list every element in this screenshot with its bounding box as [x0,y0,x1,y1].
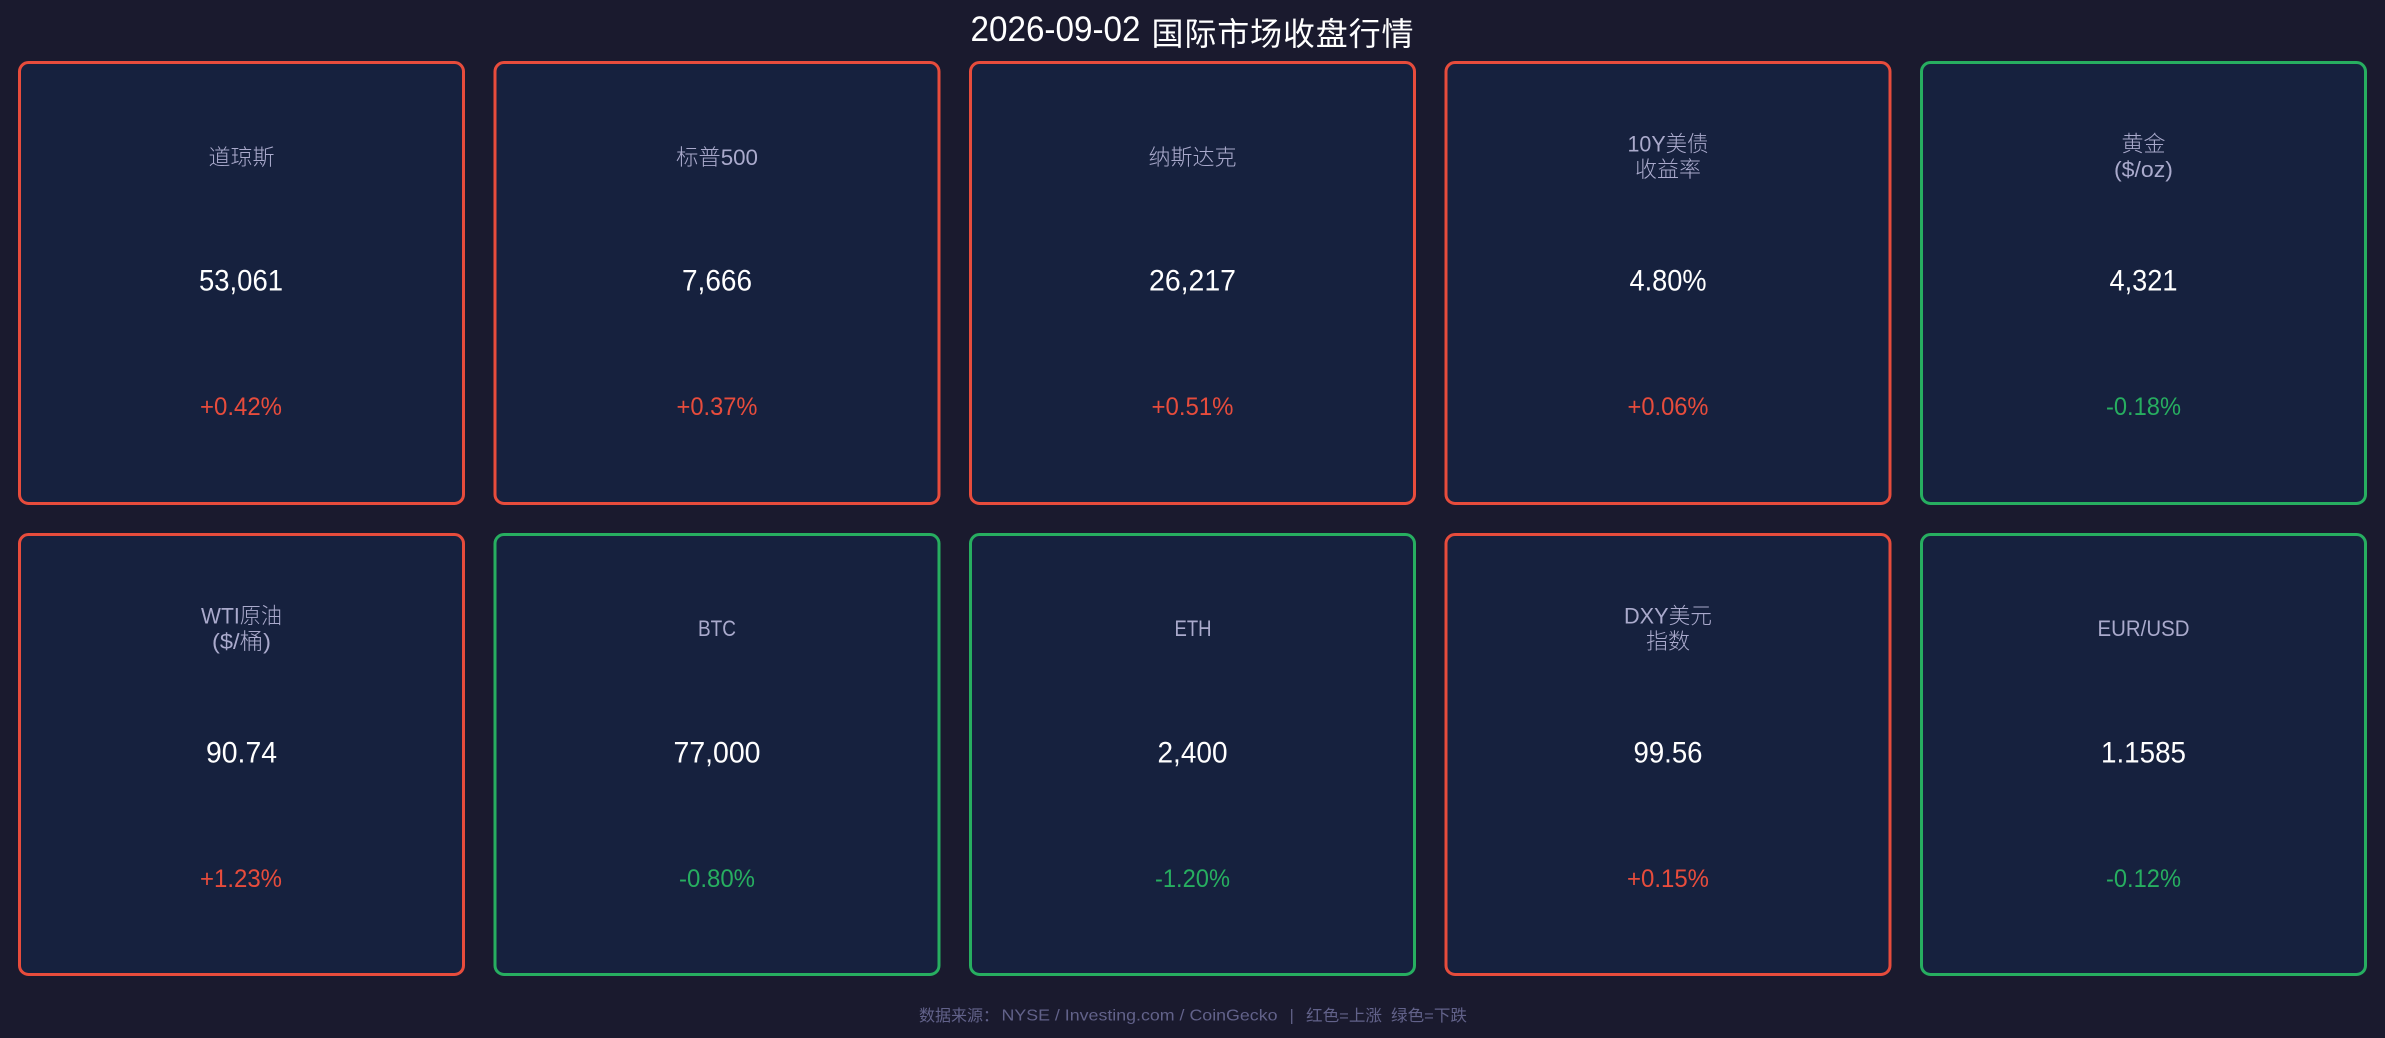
panel: 黄金: -0.18% [2106,393,2181,421]
panel: 10Y美债收益率: 4.80% [1630,264,1706,298]
footer: data source and colour legend [919,1007,1467,1025]
panel: EUR/USD: EUR/USD [2098,616,2190,641]
panel: WTI原油: WTI原油 [201,604,282,628]
panel: 纳斯达克: 26,217 [1149,264,1236,298]
panel: 纳斯达克: +0.51% [1152,393,1234,421]
panel: BTC: BTC [698,616,736,641]
panel: ETH: ETH [1174,616,1212,641]
title: 2026-09-02 [970,10,1140,49]
panel: WTI原油: +1.23% [200,865,282,893]
panel: ETH: 2,400 [1158,736,1228,770]
panel: ETH [970,534,1414,974]
panel: 黄金: 4,321 [2110,264,2178,298]
panel: 标普500: 标普500 [676,145,758,170]
panel: 纳斯达克 [970,62,1414,504]
footer: data source and colour legend: 数据来源： [919,1007,999,1025]
panel: 标普500 [495,62,939,504]
panel: 10Y美债收益率: 10Y美债 [1628,132,1708,156]
panel: 道琼斯: 道琼斯 [208,145,274,170]
panel: 标普500: 7,666 [682,264,752,298]
title: 国际市场收盘行情 [1152,16,1414,52]
panel: 10Y美债收益率 [1446,62,1890,504]
footer: data source and colour legend: | [1290,1008,1294,1024]
panel: 纳斯达克: 纳斯达克 [1148,145,1236,170]
panel: DXY美元指数: +0.15% [1627,865,1709,893]
panel: DXY美元指数: 指数 [1646,629,1690,654]
panel: DXY美元指数: 99.56 [1634,736,1702,770]
panel: 道琼斯: 53,061 [199,264,283,298]
footer: data source and colour legend: 绿色=下跌 [1391,1007,1467,1025]
panel: 黄金 [1922,62,2366,504]
panel: 标普500: +0.37% [676,393,758,421]
panel: DXY美元指数: DXY美元 [1624,604,1712,628]
panel: BTC: 77,000 [674,736,760,770]
panel: ETH: -1.20% [1155,865,1230,893]
panel: WTI原油 [20,534,464,974]
panel: WTI原油: 90.74 [206,736,277,770]
footer: data source and colour legend: NYSE / Investing.com / CoinGecko [1002,1008,1278,1024]
panel: 道琼斯: +0.42% [200,393,282,421]
panel: 10Y美债收益率: +0.06% [1628,393,1708,421]
panel: DXY美元指数 [1446,534,1890,974]
panel: 道琼斯 [20,62,464,504]
footer: data source and colour legend: 红色=上涨 [1306,1007,1382,1025]
panel: EUR/USD [1922,534,2366,974]
panel: 黄金: 黄金 [2122,132,2166,156]
panel: 黄金: ($/oz) [2114,157,2173,182]
panel: BTC: -0.80% [679,865,755,893]
panel: WTI原油: ($/桶) [212,629,271,654]
title [970,10,1414,52]
panel: 10Y美债收益率: 收益率 [1635,157,1701,182]
panel: EUR/USD: -0.12% [2106,865,2181,893]
panel: EUR/USD: 1.1585 [2101,736,2186,770]
panel: BTC [495,534,939,974]
